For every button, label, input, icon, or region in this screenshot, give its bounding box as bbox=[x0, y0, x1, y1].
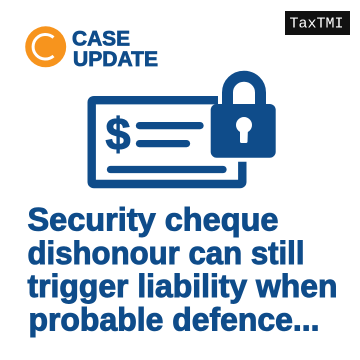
logo: TaxTMI bbox=[285, 11, 350, 35]
title: headline: probable defence... bbox=[28, 302, 320, 338]
icon: cheque bbox=[92, 100, 242, 184]
heading: case update bbox=[72, 27, 158, 71]
title: headline: trigger liability when bbox=[28, 268, 338, 304]
heading: case update: CASE bbox=[72, 27, 130, 50]
title: headline: dishonour can still bbox=[28, 235, 304, 271]
heading: case update: UPDATE bbox=[73, 48, 158, 71]
title: headline bbox=[28, 202, 338, 338]
title: headline: Security cheque bbox=[28, 202, 278, 238]
illustration: locked cheque bbox=[92, 76, 276, 184]
cheque text lines bbox=[110, 126, 223, 170]
logo: TaxTMI: TaxTMI bbox=[290, 16, 344, 32]
icon: orange circle with C bbox=[25, 26, 66, 67]
icon: padlock bbox=[211, 76, 276, 158]
brand badge: case update bbox=[25, 26, 158, 71]
dollar sign: $ bbox=[105, 108, 131, 160]
